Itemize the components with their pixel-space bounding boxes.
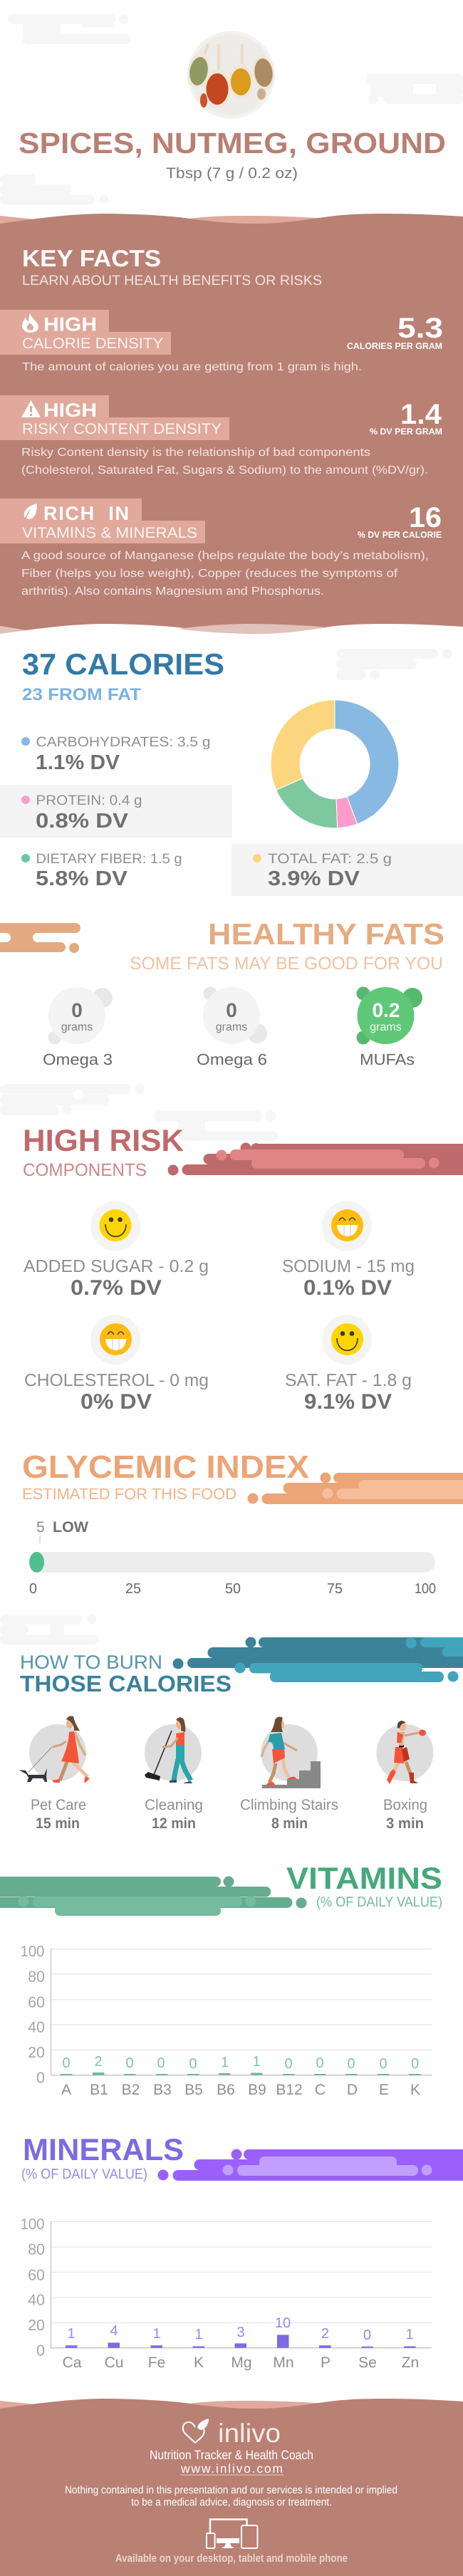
fact: rich in vitamins and minerals: A good source of Manganese (helps regulate the body’s metabolism), — [21, 550, 429, 562]
bar chart: minerals: 1 — [194, 2327, 203, 2342]
logo: inlivo: inlivo — [218, 2419, 281, 2448]
bar chart: minerals: 4 — [110, 2323, 118, 2339]
item: MUFAs: grams — [370, 1021, 402, 1033]
panel: footer — [0, 2399, 463, 2576]
activity: pet care — [19, 1716, 90, 1832]
heading: vitamins: VITAMINS — [286, 1862, 442, 1896]
activity: climbing stairs — [240, 1717, 338, 1832]
legend: total fat: 3.9% DV — [268, 867, 360, 890]
item: cholesterol: 0% DV — [80, 1390, 152, 1414]
item: omega 6: 0 — [226, 999, 237, 1021]
bar chart: vitamins: 100 — [20, 1943, 45, 1960]
item: MUFAs: MUFAs — [360, 1050, 415, 1068]
decoration: orange bars — [0, 923, 80, 953]
icon: grin — [331, 1209, 363, 1241]
item: cholesterol — [24, 1315, 209, 1414]
icon: boxer — [387, 1721, 426, 1784]
bar chart: minerals: 1 — [405, 2327, 414, 2342]
activity: climbing stairs: Climbing Stairs — [240, 1797, 338, 1813]
bar chart: minerals: Mg — [231, 2355, 252, 2371]
title: SPICES, NUTMEG, GROUND — [19, 127, 446, 160]
activity: boxing: Boxing — [383, 1797, 427, 1813]
legend: total fat — [253, 851, 392, 890]
heading: high risk: HIGH RISK — [23, 1124, 184, 1158]
legend: protein: PROTEIN: 0.4 g — [36, 793, 142, 808]
fact: risky content density: Risky Content density is the relationship of bad components — [21, 447, 370, 459]
fact: rich in vitamins and minerals: RICH IN — [43, 503, 129, 524]
gauge scale: 75 — [327, 1581, 343, 1597]
bar chart: vitamins: 0 — [125, 2055, 134, 2071]
panel: high risk components — [23, 1124, 463, 1414]
icon: devices — [207, 2520, 258, 2548]
photo: spoons of spices — [185, 31, 276, 118]
bar chart: vitamins: 0 — [189, 2056, 197, 2072]
bar chart: minerals: Se — [358, 2355, 377, 2371]
fact: rich in vitamins and minerals: arthritis). Also contains Magnesium and Phosphorus. — [21, 585, 324, 598]
activity: pet care: Pet Care — [31, 1797, 86, 1813]
tagline: Nutrition Tracker & Health Coach — [150, 2448, 313, 2462]
fact: calorie density: HIGH — [43, 313, 97, 335]
bar chart: vitamins: B5 — [184, 2082, 203, 2098]
icon: woman sweeping — [145, 1717, 192, 1783]
item: saturated fat: 9.1% DV — [304, 1390, 392, 1414]
heading: healthy fats: HEALTHY FATS — [208, 917, 444, 951]
item: MUFAs: 0.2 — [373, 999, 400, 1021]
bar chart: minerals: P — [321, 2355, 331, 2371]
item: saturated fat — [285, 1315, 412, 1414]
gauge scale: 25 — [125, 1581, 141, 1597]
serving size: Tbsp (7 g / 0.2 oz) — [166, 165, 298, 182]
bar chart: vitamins: 0 — [347, 2056, 355, 2072]
gauge scale: 100 — [415, 1581, 436, 1597]
legend: protein — [21, 793, 142, 833]
subheading: SOME FATS MAY BE GOOD FOR YOU — [130, 954, 443, 974]
bar chart: vitamins: A — [61, 2082, 71, 2098]
bar chart: minerals: 100 — [20, 2216, 45, 2233]
activity: cleaning — [145, 1717, 203, 1832]
donut chart — [271, 700, 399, 828]
item: sodium: 0.1% DV — [303, 1276, 392, 1300]
availability note: Available on your desktop, tablet and mobile phone — [115, 2552, 348, 2565]
disclaimer — [65, 2484, 397, 2508]
heading: those calories: THOSE CALORIES — [20, 1671, 232, 1696]
fact: risky content density: (Cholesterol, Saturated Fat, Sugars & Sodium) to the amount (%DV/gr). — [21, 464, 428, 476]
bar chart: vitamins: B9 — [248, 2082, 266, 2098]
fact: calorie density: CALORIES PER GRAM — [347, 341, 442, 351]
bar chart: vitamins — [20, 1943, 432, 2098]
icon: stairs and woman — [261, 1717, 321, 1788]
heading: calories: 37 CALORIES — [22, 647, 224, 681]
bar chart: vitamins: 0 — [379, 2056, 387, 2072]
decoration: purple bars — [158, 2149, 463, 2181]
bar chart: minerals: Ca — [63, 2355, 82, 2371]
bar chart: vitamins: E — [379, 2082, 389, 2098]
item: omega 3: Omega 3 — [43, 1050, 113, 1068]
icon: leaf — [24, 504, 37, 519]
bar chart: vitamins: 0 — [411, 2056, 419, 2072]
fact: calorie density: 5.3 — [397, 313, 443, 344]
bar chart: vitamins: K — [410, 2082, 420, 2098]
fact: rich in vitamins and minerals — [0, 499, 442, 598]
legend: carbohydrates: CARBOHYDRATES: 3.5 g — [36, 734, 211, 750]
decoration: orange bars — [248, 1473, 463, 1504]
item: MUFAs — [356, 987, 422, 1068]
gauge value — [36, 1519, 88, 1543]
fact: rich in vitamins and minerals: VITAMINS & MINERALS — [22, 525, 197, 541]
icon: flame — [22, 313, 38, 333]
legend: carbohydrates — [21, 734, 211, 774]
subheading: from fat: 23 FROM FAT — [22, 685, 141, 704]
bar chart: vitamins: 0 — [62, 2055, 71, 2071]
panel: healthy fats — [0, 917, 444, 1068]
icon: grin — [100, 1323, 132, 1355]
activity: climbing stairs: 8 min — [271, 1815, 308, 1832]
item: omega 3: 0 — [71, 999, 83, 1021]
fact: rich in vitamins and minerals: 16 — [409, 502, 442, 533]
bar chart: minerals: Mn — [273, 2355, 294, 2371]
panel: how to burn those calories — [19, 1637, 463, 1832]
panel: key facts — [0, 214, 463, 641]
bar chart: minerals: 10 — [275, 2315, 291, 2331]
heading: how to burn: HOW TO BURN — [20, 1652, 162, 1673]
item: omega 3: grams — [61, 1021, 93, 1033]
item: sodium — [282, 1201, 415, 1300]
fact: risky content density: 1.4 — [400, 399, 442, 430]
gauge scale: 50 — [225, 1581, 241, 1597]
bar chart: vitamins: 0 — [284, 2056, 293, 2072]
bar chart: vitamins: 2 — [94, 2054, 103, 2070]
item: added sugar — [24, 1201, 209, 1300]
bar chart: vitamins: B1 — [90, 2082, 108, 2098]
legend: dietary fiber: DIETARY FIBER: 1.5 g — [36, 851, 182, 867]
gauge value: 5 — [36, 1519, 45, 1535]
bar chart: vitamins: B12 — [276, 2082, 303, 2098]
legend: protein: 0.8% DV — [36, 810, 129, 833]
activity: cleaning: 12 min — [152, 1815, 196, 1832]
icon: smiley — [100, 1209, 131, 1241]
gauge scale — [29, 1581, 436, 1597]
subheading: (% OF DAILY VALUE) — [316, 1894, 442, 1910]
item: sodium: SODIUM - 15 mg — [282, 1257, 415, 1276]
bar chart: minerals — [20, 2216, 432, 2371]
legend: total fat: TOTAL FAT: 2.5 g — [268, 851, 392, 867]
bar chart: minerals: 2 — [321, 2326, 329, 2342]
fact: calorie density: The amount of calories you are getting from 1 gram is high. — [22, 361, 362, 373]
bar chart: minerals: 80 — [28, 2241, 45, 2258]
item: omega 6 — [197, 987, 267, 1068]
fact: risky content density: % DV PER GRAM — [370, 427, 442, 437]
legend: carbohydrates: 1.1% DV — [36, 751, 120, 774]
bar chart: minerals: 1 — [67, 2326, 76, 2342]
background clouds: header — [0, 14, 463, 204]
bar chart: minerals: 60 — [28, 2266, 45, 2283]
bar chart: minerals: 20 — [28, 2317, 45, 2334]
fact: rich in vitamins and minerals: Fiber (helps you lose weight), Copper (reduces the symptoms of — [21, 568, 398, 580]
fact: risky content density: HIGH — [43, 400, 97, 421]
activity: boxing — [376, 1721, 433, 1832]
decoration: teal bars — [172, 1637, 463, 1682]
legend: dietary fiber — [21, 851, 182, 890]
bar chart: minerals: 0 — [363, 2327, 371, 2343]
activity: pet care: 15 min — [36, 1815, 80, 1832]
item: cholesterol: CHOLESTEROL - 0 mg — [24, 1371, 209, 1390]
item: omega 6: Omega 6 — [197, 1050, 267, 1068]
icon: smiley — [331, 1323, 363, 1355]
legend band backgrounds — [0, 785, 463, 896]
background cloud: burn calories — [0, 1615, 98, 1644]
bar chart: minerals: 3 — [236, 2325, 245, 2340]
panel: calories — [0, 647, 463, 896]
heading: key facts: KEY FACTS — [22, 245, 161, 271]
bar chart: minerals: 0 — [36, 2342, 45, 2359]
decoration: green bars — [0, 1876, 306, 1916]
item: omega 6: grams — [216, 1021, 247, 1033]
bar chart: vitamins: 20 — [28, 2044, 45, 2061]
bar chart: minerals: Cu — [105, 2355, 123, 2371]
subheading: (% OF DAILY VALUE) — [21, 2166, 147, 2182]
fact: calorie density: CALORIE DENSITY — [22, 335, 163, 352]
bar chart: vitamins: 0 — [157, 2055, 165, 2071]
background cloud: calories — [337, 649, 452, 680]
bar chart: vitamins: B6 — [217, 2082, 235, 2098]
bar chart: vitamins: B2 — [122, 2082, 140, 2098]
fact: calorie density — [0, 310, 443, 373]
bar chart: minerals: 1 — [152, 2326, 161, 2342]
icon: woman walking dog — [19, 1716, 90, 1783]
bar chart: vitamins: 1 — [221, 2055, 229, 2070]
legend: dietary fiber: 5.8% DV — [36, 867, 128, 890]
panel: minerals — [20, 2133, 463, 2371]
gauge value: LOW — [53, 1519, 88, 1535]
subheading: components: COMPONENTS — [23, 1160, 147, 1180]
bar chart: minerals: Fe — [148, 2355, 165, 2371]
icon: warning triangle — [21, 400, 41, 417]
bar chart: vitamins: D — [347, 2082, 358, 2098]
fact: rich in vitamins and minerals: % DV PER CALORIE — [358, 530, 442, 540]
heading: glycemic index: GLYCEMIC INDEX — [22, 1449, 309, 1485]
subheading: ESTIMATED FOR THIS FOOD — [22, 1485, 236, 1503]
bar chart: minerals: Zn — [402, 2355, 419, 2371]
icon: heart with leaf — [183, 2419, 209, 2443]
bar chart: vitamins: 60 — [28, 1994, 45, 2011]
bar chart: vitamins: 80 — [28, 1968, 45, 1986]
heading: minerals: MINERALS — [23, 2133, 184, 2167]
fact: risky content density: RISKY CONTENT DENSITY — [22, 421, 222, 437]
bar chart: vitamins: B3 — [153, 2082, 172, 2098]
fact: risky content density — [0, 395, 442, 476]
item: omega 3 — [43, 987, 113, 1068]
activity: cleaning: Cleaning — [145, 1797, 203, 1813]
panel: glycemic index — [22, 1449, 463, 1597]
disclaimer: Nothing contained in this presentation and our services is intended or implied — [65, 2484, 397, 2496]
background clouds: high risk — [0, 1084, 278, 1141]
bar chart: vitamins: 0 — [316, 2055, 324, 2071]
subheading: LEARN ABOUT HEALTH BENEFITS OR RISKS — [22, 273, 322, 288]
bar chart: vitamins: 40 — [28, 2018, 45, 2035]
bar chart: vitamins: 1 — [252, 2054, 261, 2070]
activity: boxing: 3 min — [386, 1815, 424, 1832]
item: added sugar: 0.7% DV — [71, 1276, 162, 1300]
gauge bar — [29, 1552, 435, 1573]
website link: www.inlivo.com — [180, 2461, 283, 2476]
bar chart: vitamins: C — [315, 2082, 326, 2098]
decoration: red bars — [168, 1142, 463, 1175]
bar chart: vitamins: 0 — [36, 2070, 45, 2087]
gauge scale: 0 — [29, 1581, 37, 1597]
item: added sugar: ADDED SUGAR - 0.2 g — [24, 1257, 209, 1276]
logo: inlivo — [183, 2419, 281, 2448]
item: saturated fat: SAT. FAT - 1.8 g — [285, 1371, 412, 1390]
panel: vitamins — [0, 1862, 442, 2098]
bar chart: minerals: K — [194, 2355, 204, 2371]
bar chart: minerals: 40 — [28, 2292, 45, 2309]
disclaimer: to be a medical advice, diagnosis or treatment. — [131, 2496, 332, 2508]
